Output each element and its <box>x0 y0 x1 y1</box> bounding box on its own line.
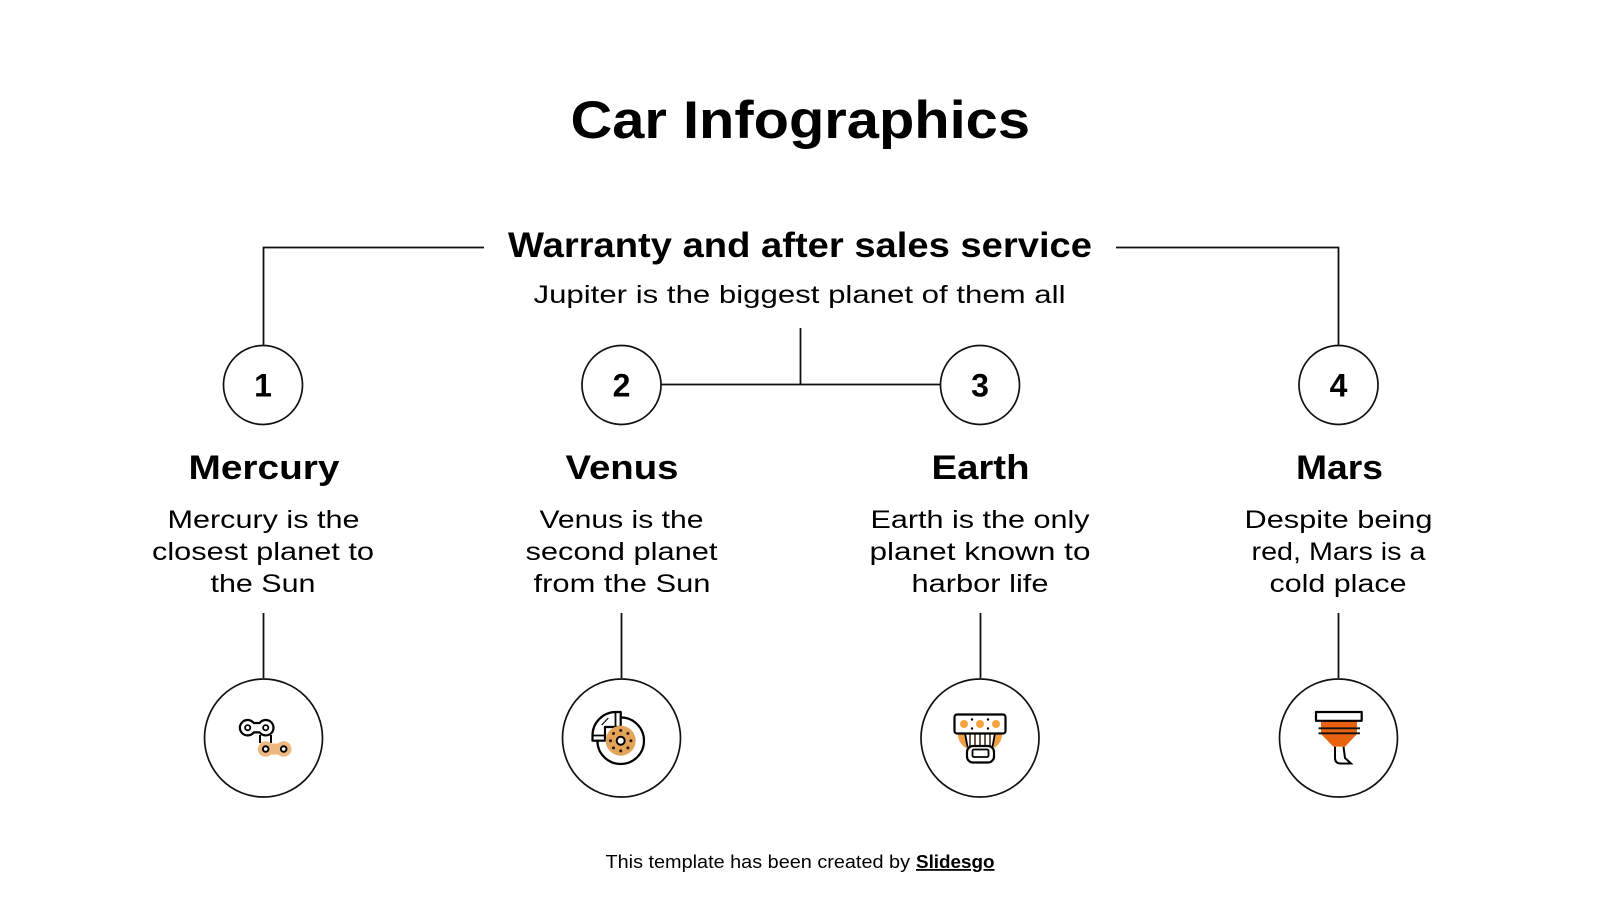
connector: Mercury to icon <box>262 613 264 678</box>
title: Car Infographics <box>570 91 1030 150</box>
column: Mercury <box>152 346 374 797</box>
name: Mars: Mars <box>1296 449 1383 487</box>
number circle 4: 4 <box>1330 368 1348 404</box>
number circle 2 <box>582 346 661 424</box>
description: Mercury: Mercury is the <box>168 506 360 534</box>
description: Earth <box>870 506 1090 598</box>
footer credit: This template has been created by <box>606 852 910 872</box>
column: Earth <box>870 346 1090 797</box>
connector: right to circle 4 <box>1116 248 1338 345</box>
column: Venus <box>526 346 718 797</box>
description: Mars: cold place <box>1270 570 1406 598</box>
connector: Venus to icon <box>620 613 622 678</box>
icon circle: brake disc <box>562 679 680 797</box>
number circle 3 <box>940 346 1020 424</box>
name: Venus: Venus <box>566 449 678 487</box>
connector: center to circles 2 and 3 <box>661 328 940 384</box>
description: Venus: from the Sun <box>534 570 710 598</box>
name: Earth: Earth <box>932 449 1030 487</box>
description: Mars: red, Mars is a <box>1252 538 1426 566</box>
description: Mercury: closest planet to <box>152 538 374 566</box>
name: Mercury: Mercury <box>188 449 340 487</box>
description: Mars: Despite being <box>1244 506 1432 534</box>
description: Venus: Venus is the <box>540 506 704 534</box>
icon circle: brake fluid funnel <box>1280 679 1398 797</box>
description: Earth: harbor life <box>912 570 1048 598</box>
description: Earth: Earth is the only <box>870 506 1090 534</box>
number circle 1: 1 <box>254 368 272 404</box>
heading: warranty: Warranty and after sales service <box>508 226 1092 265</box>
number circle 2: 2 <box>613 368 630 404</box>
connector: Mars to icon <box>1338 613 1340 678</box>
description: Venus <box>526 506 718 598</box>
description: Mercury: the Sun <box>210 570 316 598</box>
number circle 3: 3 <box>971 368 989 404</box>
description: Earth: planet known to <box>870 538 1090 566</box>
connector: Earth to icon <box>980 613 982 678</box>
column: Mars <box>1244 346 1432 797</box>
number circle 1 <box>224 346 302 424</box>
footer credit: Slidesgo <box>916 852 995 872</box>
icon circle: chain <box>204 679 322 797</box>
description: Venus: second planet <box>526 538 718 566</box>
description: Mercury <box>152 506 374 598</box>
description: Mars <box>1244 506 1432 598</box>
icon circle: fuse block <box>921 679 1039 797</box>
number circle 4 <box>1299 346 1378 424</box>
connector: left to circle 1 <box>264 248 484 345</box>
subtitle: Jupiter is the biggest planet of them all <box>534 281 1066 309</box>
